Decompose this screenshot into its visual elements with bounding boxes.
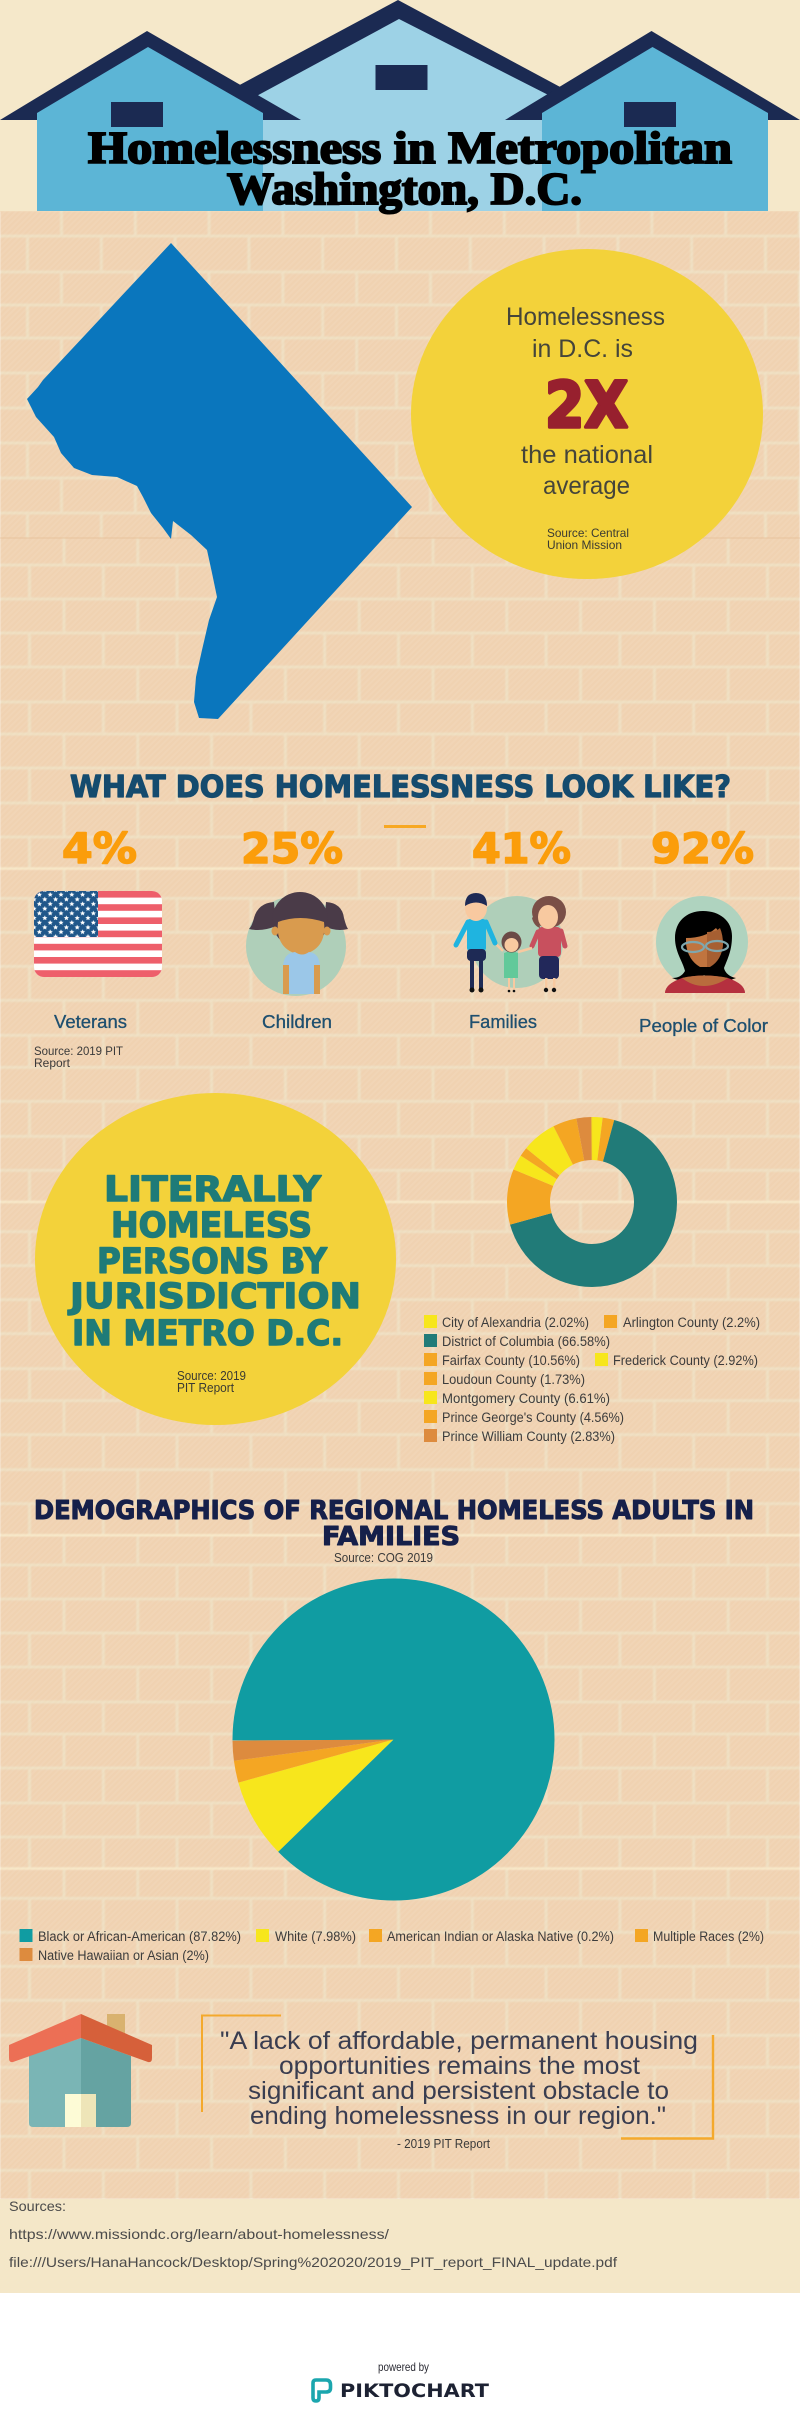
- pie chart: [313, 1659, 474, 1820]
- callout: literally homeless persons: HOMELESS: [111, 1206, 312, 1246]
- title: [88, 123, 732, 214]
- heading: demographics: DEMOGRAPHICS OF REGIONAL HOMELESS ADULTS IN: [34, 1496, 754, 1526]
- quote bracket bottom right: [621, 2035, 713, 2138]
- stat: families: 41%: [472, 824, 571, 873]
- callout: 2X national average: Union Mission: [547, 538, 622, 552]
- mother: [518, 896, 566, 992]
- stat: veterans: [34, 824, 162, 1070]
- stat: children: 25%: [241, 824, 343, 873]
- callout: literally homeless persons: IN METRO D.C.: [72, 1314, 343, 1354]
- stat: families: Families: [469, 1012, 537, 1032]
- donut legend: [424, 1315, 760, 1444]
- pie legend: Multiple Races (2%): [653, 1929, 764, 1944]
- heading: demographics: FAMILIES: [322, 1522, 460, 1552]
- quote text: "A lack of affordable, permanent housing: [220, 2027, 698, 2055]
- pie legend: Black or African-American (87.82%): [38, 1929, 241, 1944]
- sources: file:///Users/HanaHancock/Desktop/Spring%202020/2019_PIT_report_FINAL_update.pdf: [9, 2254, 617, 2270]
- father: [456, 893, 503, 992]
- header houses: [0, 0, 800, 211]
- callout: 2X national average: Source: Central: [547, 526, 629, 540]
- quote text: significant and persistent obstacle to: [248, 2077, 669, 2105]
- donut legend: Arlington County (2.2%): [623, 1315, 760, 1330]
- heading: what does homelessness look like: WHAT DOES HOMELESSNESS LOOK LIKE?: [70, 770, 731, 805]
- donut legend: Loudoun County (1.73%): [442, 1372, 585, 1387]
- stat: veterans: 4%: [62, 824, 137, 873]
- big 2X figure: 2X: [545, 369, 628, 442]
- callout: 2X national average: [411, 249, 763, 579]
- callout: literally homeless persons: PIT Report: [177, 1381, 234, 1395]
- left house: [0, 31, 301, 211]
- stat: veterans: Veterans: [54, 1012, 127, 1032]
- sources: [9, 2198, 617, 2270]
- title: Homelessness in Metropolitan: [88, 123, 732, 173]
- pie legend: American Indian or Alaska Native (0.2%): [387, 1929, 614, 1944]
- donut legend: Frederick County (2.92%): [613, 1353, 758, 1368]
- callout: 2X national average: in D.C. is: [532, 335, 633, 363]
- source note: Source: 2019 PIT: [34, 1044, 124, 1058]
- right house: [505, 31, 800, 211]
- footer logo: [313, 2360, 489, 2402]
- callout: literally homeless persons: PERSONS BY: [97, 1242, 328, 1282]
- sources: Sources:: [9, 2198, 66, 2214]
- callout: 2X national average: average: [543, 472, 630, 500]
- donut legend: Fairfax County (10.56%): [442, 1353, 580, 1368]
- quote: - 2019 PIT Report: [397, 2136, 490, 2151]
- icon: family: [456, 893, 566, 992]
- daughter: [502, 932, 522, 992]
- source: COG: Source: COG 2019: [334, 1550, 433, 1565]
- quote text: [220, 2027, 698, 2130]
- stat: people of color: [639, 824, 768, 1036]
- quote text: opportunities remains the most: [279, 2052, 640, 2080]
- donut chart: [528, 1138, 656, 1266]
- quote text: ending homelessness in our region.": [250, 2102, 666, 2130]
- icon: american flag: [34, 891, 162, 977]
- callout: literally homeless persons: [35, 1093, 396, 1425]
- stat: children: [241, 824, 348, 1032]
- icon: piktochart mark: [313, 2380, 330, 2401]
- donut legend: Prince George's County (4.56%): [442, 1410, 624, 1425]
- footer logo: powered by: [378, 2360, 429, 2374]
- stat: people of color: People of Color: [639, 1016, 768, 1036]
- source note: [34, 1044, 124, 1070]
- icon: child: [246, 892, 348, 996]
- center house: [206, 0, 590, 211]
- donut legend: Prince William County (2.83%): [442, 1429, 615, 1444]
- title: Washington, D.C.: [227, 164, 582, 214]
- pie legend: Native Hawaiian or Asian (2%): [38, 1948, 209, 1963]
- quote: [202, 2016, 713, 2151]
- callout: literally homeless persons: LITERALLY: [104, 1170, 322, 1210]
- heading: demographics: [34, 1496, 754, 1552]
- icon: woman with glasses: [656, 896, 748, 993]
- pie legend: White (7.98%): [275, 1929, 356, 1944]
- donut legend: District of Columbia (66.58%): [442, 1334, 610, 1349]
- footer logo: PIKTOCHART: [340, 2380, 489, 2402]
- sources: https://www.missiondc.org/learn/about-homelessness/: [9, 2226, 389, 2242]
- source note: Report: [34, 1056, 71, 1070]
- donut legend: City of Alexandria (2.02%): [442, 1315, 589, 1330]
- callout: literally homeless persons: Source: 2019: [177, 1369, 246, 1383]
- quote bracket top left: [202, 2016, 281, 2112]
- stat: children: Children: [262, 1012, 332, 1032]
- stat: people of color: 92%: [651, 824, 754, 873]
- map of Washington D.C.: [27, 243, 412, 719]
- callout: literally homeless persons: JURISDICTION: [68, 1277, 361, 1317]
- callout: 2X national average: Homelessness: [506, 303, 665, 331]
- callout: 2X national average: the national: [521, 441, 653, 469]
- pie legend: [20, 1929, 764, 1963]
- icon: house: [9, 2014, 152, 2127]
- stat: families: [456, 824, 571, 1032]
- donut legend: Montgomery County (6.61%): [442, 1391, 610, 1406]
